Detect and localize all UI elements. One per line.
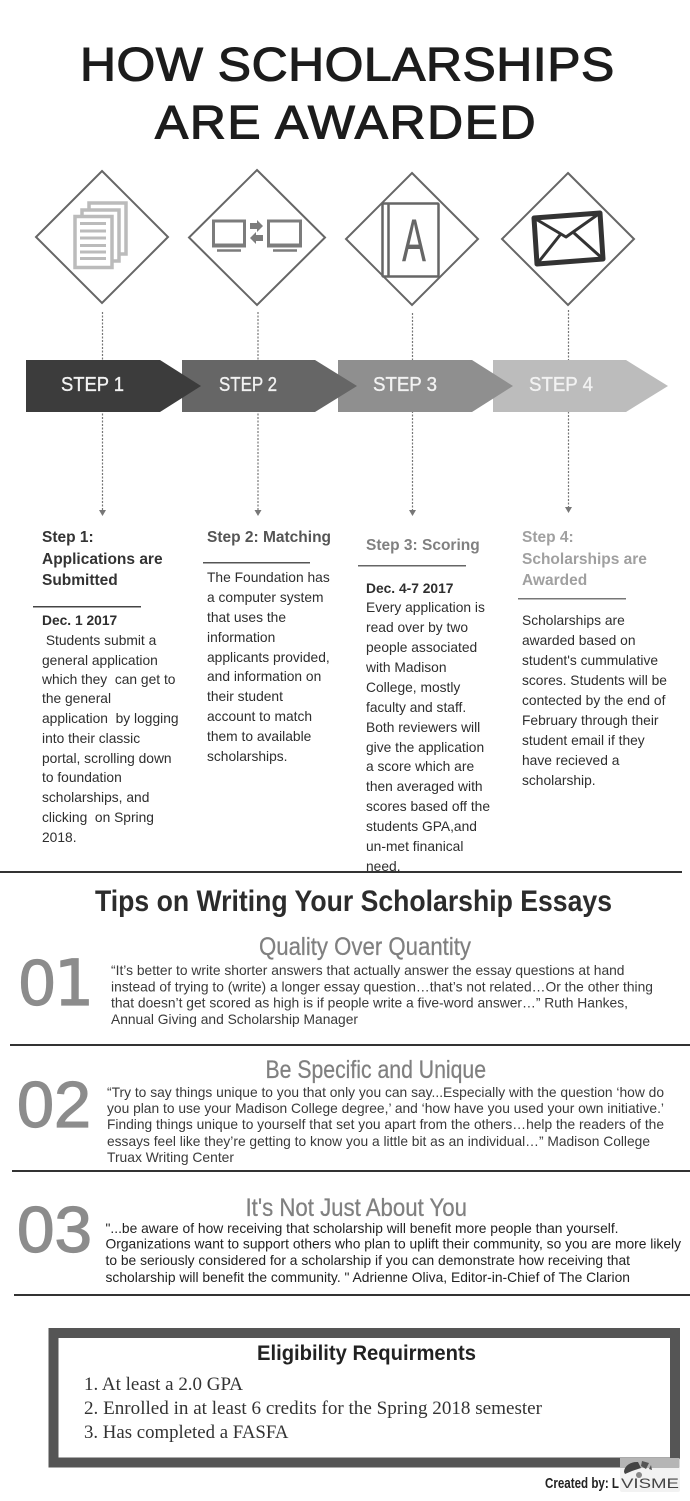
tip 3 number: 03 — [17, 1193, 92, 1266]
eligibility list — [84, 1374, 543, 1443]
step 4 body: contected by the end of — [522, 693, 666, 708]
step 1 body: Students submit a — [42, 633, 157, 648]
tip 3 heading: It's Not Just About You — [246, 1194, 467, 1222]
arrow: step 2: STEP 2 — [219, 374, 277, 396]
step 3 body — [365, 581, 490, 874]
step 3 body: students GPA,and — [366, 819, 477, 834]
step 2 body: their student — [207, 689, 283, 704]
step 4 body: student's cummulative — [522, 653, 658, 668]
step 4 heading: Scholarships are — [522, 551, 647, 568]
step 1 heading: Applications are — [42, 551, 163, 568]
eligibility heading: Eligibility Requirments — [257, 1342, 476, 1365]
step 3 column — [358, 537, 490, 874]
arrow: step 1 — [26, 360, 201, 412]
tip 2 heading: Be Specific and Unique — [266, 1056, 486, 1084]
step 1 body: general application — [42, 653, 158, 668]
step 1 body: scholarships, and — [42, 790, 149, 805]
step 1 column — [33, 529, 179, 845]
title: ARE AWARDED — [155, 97, 536, 149]
step 3 body: faculty and staff. — [366, 700, 466, 715]
step 3 body: College, mostly — [366, 680, 460, 695]
tip 2 number: 02 — [17, 1068, 91, 1141]
step 1 body: 2018. — [42, 830, 77, 845]
step 3 body: then averaged with — [366, 779, 483, 794]
arrow: step 2 — [182, 360, 357, 412]
step 2 body: information — [207, 630, 275, 645]
tip 1 body: “It’s better to write shorter answers that actually answer the essay questions at hand — [111, 962, 624, 978]
arrow: step 1: STEP 1 — [61, 374, 124, 396]
step 1 body: to foundation — [42, 770, 122, 785]
step 1 body: Dec. 1 2017 — [42, 613, 118, 628]
step 4 column — [518, 529, 667, 788]
step 3 body: need. — [366, 859, 401, 874]
step 2 heading: Step 2: Matching — [207, 529, 331, 546]
tip 1 body: Annual Giving and Scholarship Manager — [111, 1011, 358, 1027]
tip 3 — [17, 1193, 681, 1285]
diamond 3 with book icon — [346, 173, 478, 305]
icon: documents — [75, 203, 126, 268]
tip 1 body: that doesn’t get scored as high is if people write a five-word answer…” Ruth Hankes, — [111, 994, 628, 1010]
step 3 body: scores based off the — [366, 799, 490, 814]
tip 2 body: Finding things unique to yourself that set you apart from the others…help the readers of the — [107, 1116, 664, 1132]
step 2 body: a computer system — [207, 590, 324, 605]
title — [80, 39, 614, 149]
icon: envelope — [534, 213, 603, 264]
step 2 body — [207, 570, 330, 764]
tip 3 body: Organizations want to support others who plan to uplift their community, so you are more likely — [106, 1236, 681, 1252]
tip 2 body — [107, 1084, 664, 1165]
step 1 body: application by logging — [42, 711, 179, 726]
step 4 heading: Step 4: — [522, 529, 574, 546]
icon: two computers — [212, 220, 302, 250]
step 4 body: scholarship. — [522, 773, 596, 788]
step 1 body: the general — [42, 691, 111, 706]
step 4 heading — [522, 529, 647, 589]
connector lines — [99, 310, 572, 516]
step 4 body: February through their — [522, 713, 659, 728]
step 1 body: which they can get to — [41, 672, 176, 687]
step 4 body: awarded based on — [522, 633, 636, 648]
title: HOW SCHOLARSHIPS — [80, 39, 614, 91]
tip 1 — [19, 933, 653, 1027]
tip 1 body: instead of trying to (write) a longer essay question…that’s not related…Or the other thing — [111, 978, 653, 994]
step 1 heading: Submitted — [42, 572, 118, 589]
step 4 body: have recieved a — [522, 753, 620, 768]
tip 3 body — [106, 1220, 681, 1285]
tip 3 body: scholarship will benefit the community. " Adrienne Oliva, Editor-in-Chief of The Clarion — [106, 1269, 630, 1285]
step 3 body: Every application is — [366, 600, 485, 615]
tip 3 body: to be seriously considered for a scholarship if you can demonstrate how receiving that — [106, 1252, 630, 1268]
step 1 body: into their classic — [42, 731, 140, 746]
arrow: step 4: STEP 4 — [529, 374, 593, 396]
arrow: step 3 — [338, 360, 513, 412]
step 3 body: with Madison — [365, 660, 447, 675]
step 2 body: The Foundation has — [207, 570, 330, 585]
step 3 body: a score which are — [366, 759, 474, 774]
eligibility list: 1. At least a 2.0 GPA — [84, 1374, 243, 1395]
arrow: step 4 — [493, 360, 668, 412]
step 3 heading: Step 3: Scoring — [366, 537, 480, 554]
step 3 body: give the application — [366, 740, 484, 755]
step 3 body: un-met finanical — [366, 839, 463, 854]
step 4 body: Scholarships are — [522, 613, 625, 628]
tip 1 number: 1 — [54, 947, 94, 1020]
tip 1 body — [111, 962, 653, 1027]
tip 3 body: "...be aware of how receiving that scholarship will benefit more people than yourself. — [106, 1220, 618, 1236]
step 1 body: portal, scrolling down — [42, 751, 172, 766]
eligibility list: 3. Has completed a FASFA — [84, 1422, 289, 1443]
watermark: visme logo: VISME — [621, 1475, 679, 1491]
step 2 body: and information on — [207, 669, 321, 684]
step 1 heading — [42, 529, 163, 589]
step 4 body: student email if they — [522, 733, 645, 748]
step 2 body: applicants provided, — [207, 650, 330, 665]
step 3 body: Both reviewers will — [366, 720, 480, 735]
step 3 body: read over by two — [366, 620, 468, 635]
step 1 body: clicking on Spring — [42, 810, 154, 825]
tip 2 body: Truax Writing Center — [107, 1149, 234, 1165]
eligibility list: 2. Enrolled in at least 6 credits for the Spring 2018 semester — [84, 1398, 543, 1419]
step 1 heading: Step 1: — [42, 529, 94, 546]
diamond 1 with documents icon — [36, 171, 168, 303]
step 2 body: them to available — [207, 729, 312, 744]
diamond 4 with envelope icon — [502, 173, 634, 305]
tip 2 body: “Try to say things unique to you that only you can say...Especially with the question ‘how do — [107, 1084, 664, 1100]
step 2 body: that uses the — [207, 610, 286, 625]
tip 1 heading: Quality Over Quantity — [259, 933, 471, 961]
step 2 body: account to match — [207, 709, 312, 724]
tip 2 body: you plan to use your Madison College degree,’ and ‘how have you used your own initiative.’ — [107, 1100, 664, 1116]
step 3 body: people associated — [366, 640, 477, 655]
step 4 body: scores. Students will be — [522, 673, 667, 688]
tips heading: Tips on Writing Your Scholarship Essays — [95, 885, 612, 918]
credit line: Created by: L — [545, 1476, 619, 1492]
step 2 column — [203, 529, 331, 764]
tip 2 — [17, 1056, 664, 1165]
icon: book letter A: A — [402, 207, 426, 274]
step 4 body — [522, 613, 667, 788]
panel: eligibility requirements — [54, 1333, 675, 1462]
diamond 2 with computers icon — [189, 170, 325, 305]
tip 1 number: 0 — [19, 946, 55, 1019]
step 3 body: Dec. 4-7 2017 — [366, 581, 454, 596]
step 1 body — [41, 613, 179, 845]
step 4 heading: Awarded — [522, 572, 587, 589]
tip 2 body: essays feel like they’re getting to know you a little bit as an individual…” Madison College — [107, 1133, 650, 1149]
watermark: visme logo — [620, 1458, 680, 1492]
step 2 body: scholarships. — [207, 749, 288, 764]
arrow: step 3: STEP 3 — [373, 374, 437, 396]
